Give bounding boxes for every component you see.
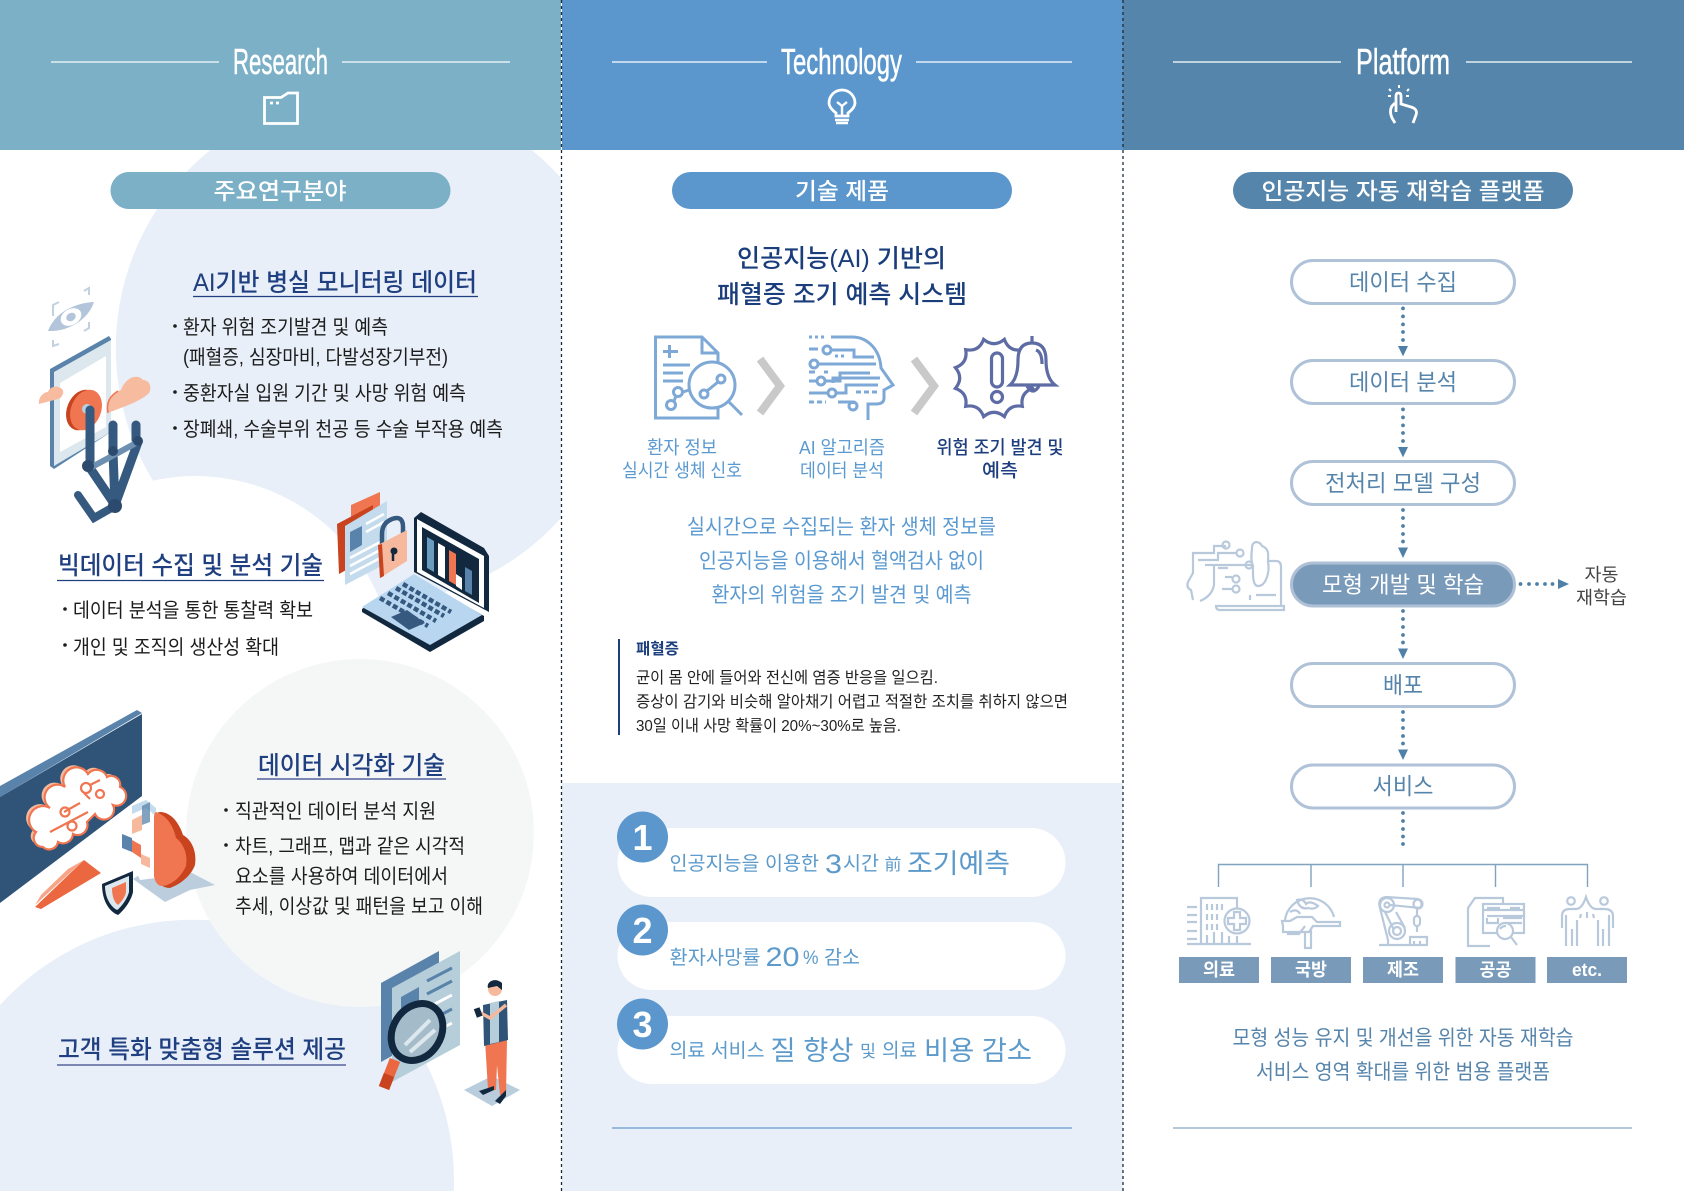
block: 빅데이터 수집 및 분석 기술: 데이터 분석을 통한 통찰력 확보 bbox=[73, 599, 313, 622]
illustration: display board with brain, cloud and shield bbox=[0, 710, 215, 915]
benefit 3 bbox=[617, 998, 1066, 1084]
icon: patient document with magnifier bbox=[656, 337, 742, 418]
flow step: 전처리 모델 구성: 전처리 모델 구성 bbox=[1325, 470, 1481, 496]
flow step: 배포: 배포 bbox=[1383, 672, 1423, 698]
section pill: 기술 제품: 기술 제품 bbox=[795, 178, 889, 204]
flow step: 데이터 수집: 데이터 수집 bbox=[1349, 269, 1457, 295]
label: 공공: 공공 bbox=[1480, 960, 1512, 980]
block: AI 병실 모니터링 데이터: (패혈증, 심장마비, 다발성장기부전) bbox=[183, 346, 448, 369]
text: system description: 인공지능을 이용해서 혈액검사 없이 bbox=[699, 550, 984, 573]
step labels: AI 알고리즘 bbox=[799, 437, 885, 458]
flow step: 서비스 bbox=[1292, 765, 1514, 808]
panel: research background shapes bbox=[0, 150, 561, 1191]
section pill: 인공지능 자동 재학습 플랫폼 bbox=[1233, 172, 1573, 209]
section pill: 주요연구분야 bbox=[110, 172, 450, 209]
benefit 3: 비용 감소 bbox=[924, 1036, 1032, 1066]
flow arrow 4 bbox=[1398, 609, 1408, 659]
arrow: retraining loop bbox=[1519, 579, 1569, 589]
note: sepsis definition: 균이 몸 안에 들어와 전신에 염증 반응을 일으킴. bbox=[636, 669, 938, 687]
block: 데이터 시각화 기술: 차트, 그래프, 맵과 같은 시각적 bbox=[235, 835, 465, 858]
text: system description bbox=[687, 516, 996, 607]
flow arrow 2 bbox=[1398, 408, 1408, 457]
illustration: document, magnifier and person bbox=[381, 951, 520, 1106]
heading: Research: Research bbox=[233, 41, 328, 82]
heading: sepsis early prediction system: 인공지능(AI) 기반의 bbox=[737, 245, 946, 273]
benefit 2: 감소 bbox=[824, 947, 860, 969]
block: 빅데이터 수집 및 분석 기술: 개인 및 조직의 생산성 확대 bbox=[73, 636, 279, 659]
illustration: eye, tablet and robot hand bbox=[39, 288, 150, 518]
heading: Technology: Technology bbox=[781, 41, 902, 82]
block: 데이터 시각화 기술: 요소를 사용하여 데이터에서 bbox=[235, 865, 448, 888]
label: 공공 bbox=[1456, 957, 1536, 983]
icon: robot arm bbox=[1379, 897, 1428, 945]
section pill: 주요연구분야: 주요연구분야 bbox=[214, 178, 346, 204]
block: 고객 특화 맞춤형 솔루션 제공: 고객 특화 맞춤형 솔루션 제공 bbox=[58, 1036, 346, 1064]
heading: Platform: Platform bbox=[1356, 41, 1450, 82]
flow step: 전처리 모델 구성 bbox=[1292, 462, 1514, 504]
block: 빅데이터 수집 및 분석 기술 bbox=[57, 552, 324, 659]
flow step: 데이터 수집 bbox=[1292, 260, 1514, 304]
block: AI 병실 모니터링 데이터 bbox=[173, 269, 503, 441]
benefit 3: 3 bbox=[632, 1004, 653, 1045]
note: sepsis definition: 30일 이내 사망 확률이 20%~30%로 높음. bbox=[636, 717, 901, 735]
label: 제조: 제조 bbox=[1387, 960, 1419, 980]
icon: AI head with brain and laptop bbox=[1187, 542, 1284, 610]
connector: dots and tree to sectors bbox=[1218, 811, 1588, 887]
section pill: 기술 제품 bbox=[672, 172, 1012, 209]
icon: touch hand bbox=[1388, 85, 1416, 123]
block: AI 병실 모니터링 데이터: AI기반 병실 모니터링 데이터 bbox=[193, 269, 477, 297]
flow arrow 3 bbox=[1398, 508, 1408, 558]
note: sepsis definition: 패혈증 bbox=[636, 640, 679, 658]
panel: technology lower background bbox=[562, 783, 1123, 1191]
note: sepsis definition: 증상이 감기와 비슷해 알아채기 어렵고 적절한 조치를 취하지 않으면 bbox=[636, 693, 1068, 711]
text: platform summary bbox=[1232, 1027, 1574, 1084]
heading: sepsis early prediction system: 패혈증 조기 예측 시스템 bbox=[717, 281, 967, 309]
step labels: 위험 조기 발견 및 bbox=[936, 437, 1064, 458]
label: 의료: 의료 bbox=[1203, 960, 1235, 980]
flow arrow 1 bbox=[1398, 306, 1408, 356]
flow step: 서비스: 서비스 bbox=[1372, 773, 1434, 799]
step labels: 데이터 분석 bbox=[800, 460, 884, 481]
block: 데이터 시각화 기술: 추세, 이상값 및 패턴을 보고 이해 bbox=[235, 895, 483, 918]
benefit 3: 및 bbox=[860, 1042, 876, 1061]
icon: people bbox=[1562, 897, 1613, 946]
block: 데이터 시각화 기술: 데이터 시각화 기술 bbox=[258, 752, 445, 780]
block: AI 병실 모니터링 데이터: 중환자실 입원 기간 및 사망 위험 예측 bbox=[183, 382, 466, 405]
benefit 1: 조기예측 bbox=[907, 849, 1010, 879]
benefit 1: 인공지능을 이용한 bbox=[670, 853, 819, 875]
arrow: chevron 1 bbox=[760, 359, 780, 413]
text: platform summary: 모형 성능 유지 및 개선을 위한 자동 재학습 bbox=[1232, 1027, 1574, 1050]
panel: platform header bbox=[1123, 0, 1684, 150]
flow step: 데이터 분석 bbox=[1292, 360, 1514, 404]
label: etc.: etc. bbox=[1572, 960, 1602, 980]
icon: military helmet bbox=[1282, 898, 1340, 948]
benefit 3: 의료 서비스 bbox=[670, 1040, 764, 1062]
benefit 2: 20 bbox=[766, 942, 800, 972]
note: sepsis definition bbox=[619, 639, 1068, 735]
icon: light bulb bbox=[829, 90, 855, 123]
benefit 3: 질 향상 bbox=[770, 1036, 854, 1066]
flow arrow 5 bbox=[1398, 710, 1408, 760]
step labels: 환자 정보 bbox=[647, 437, 717, 458]
label: 제조 bbox=[1363, 957, 1443, 983]
label: 의료 bbox=[1179, 957, 1259, 983]
panel: technology header bbox=[562, 0, 1123, 150]
label: etc. bbox=[1547, 957, 1627, 983]
benefit 2: % bbox=[803, 947, 818, 969]
benefit 3: 의료 bbox=[882, 1040, 917, 1062]
icon: AI head with circuits bbox=[809, 337, 893, 420]
text: platform summary: 서비스 영역 확대를 위한 범용 플랫폼 bbox=[1256, 1061, 1550, 1084]
block: 데이터 시각화 기술: 직관적인 데이터 분석 지원 bbox=[235, 800, 436, 823]
flow step: 데이터 분석: 데이터 분석 bbox=[1349, 369, 1457, 395]
benefit 2: 환자사망률 bbox=[670, 947, 760, 969]
benefit 1: 3 bbox=[825, 849, 842, 879]
label: 국방: 국방 bbox=[1295, 960, 1327, 980]
step labels: 예측 bbox=[982, 460, 1018, 481]
block: 빅데이터 수집 및 분석 기술: 빅데이터 수집 및 분석 기술 bbox=[58, 552, 323, 580]
label: 자동 재학습 bbox=[1576, 565, 1627, 608]
benefit 2: 2 bbox=[632, 910, 653, 951]
step labels: 실시간 생체 신호 bbox=[622, 460, 742, 481]
arrow: chevron 2 bbox=[914, 359, 934, 413]
label: 자동 재학습: 자동 bbox=[1584, 565, 1618, 585]
panel: research header bbox=[0, 0, 561, 150]
icon: hospital bbox=[1187, 898, 1251, 944]
benefit 2 bbox=[617, 904, 1066, 990]
benefit 1 bbox=[617, 812, 1066, 897]
text: system description: 환자의 위험을 조기 발견 및 예측 bbox=[712, 584, 972, 607]
illustration: documents, lock and laptop bbox=[337, 492, 489, 652]
section pill: 인공지능 자동 재학습 플랫폼: 인공지능 자동 재학습 플랫폼 bbox=[1262, 178, 1544, 204]
icon: alert burst and bell bbox=[955, 336, 1055, 417]
icon: folder bbox=[264, 93, 298, 124]
benefit 1: 1 bbox=[632, 817, 653, 858]
icon: public documents bbox=[1468, 898, 1524, 946]
label: 자동 재학습: 재학습 bbox=[1576, 588, 1627, 608]
step labels bbox=[622, 437, 1064, 481]
flow step: 모형 개발 및 학습 (highlight) bbox=[1292, 563, 1514, 606]
benefit 1: 시간 bbox=[843, 853, 879, 875]
flow step: 모형 개발 및 학습 (highlight): 모형 개발 및 학습 bbox=[1322, 572, 1484, 598]
flow step: 배포 bbox=[1292, 664, 1514, 706]
block: AI 병실 모니터링 데이터: 장폐쇄, 수술부위 천공 등 수술 부작용 예측 bbox=[183, 418, 503, 441]
label: 국방 bbox=[1271, 957, 1351, 983]
block: 데이터 시각화 기술 bbox=[224, 752, 483, 918]
benefit 1: 前 bbox=[884, 856, 902, 874]
heading: sepsis early prediction system bbox=[717, 245, 967, 309]
block: AI 병실 모니터링 데이터: 환자 위험 조기발견 및 예측 bbox=[183, 316, 388, 339]
text: system description: 실시간으로 수집되는 환자 생체 정보를 bbox=[687, 516, 996, 539]
